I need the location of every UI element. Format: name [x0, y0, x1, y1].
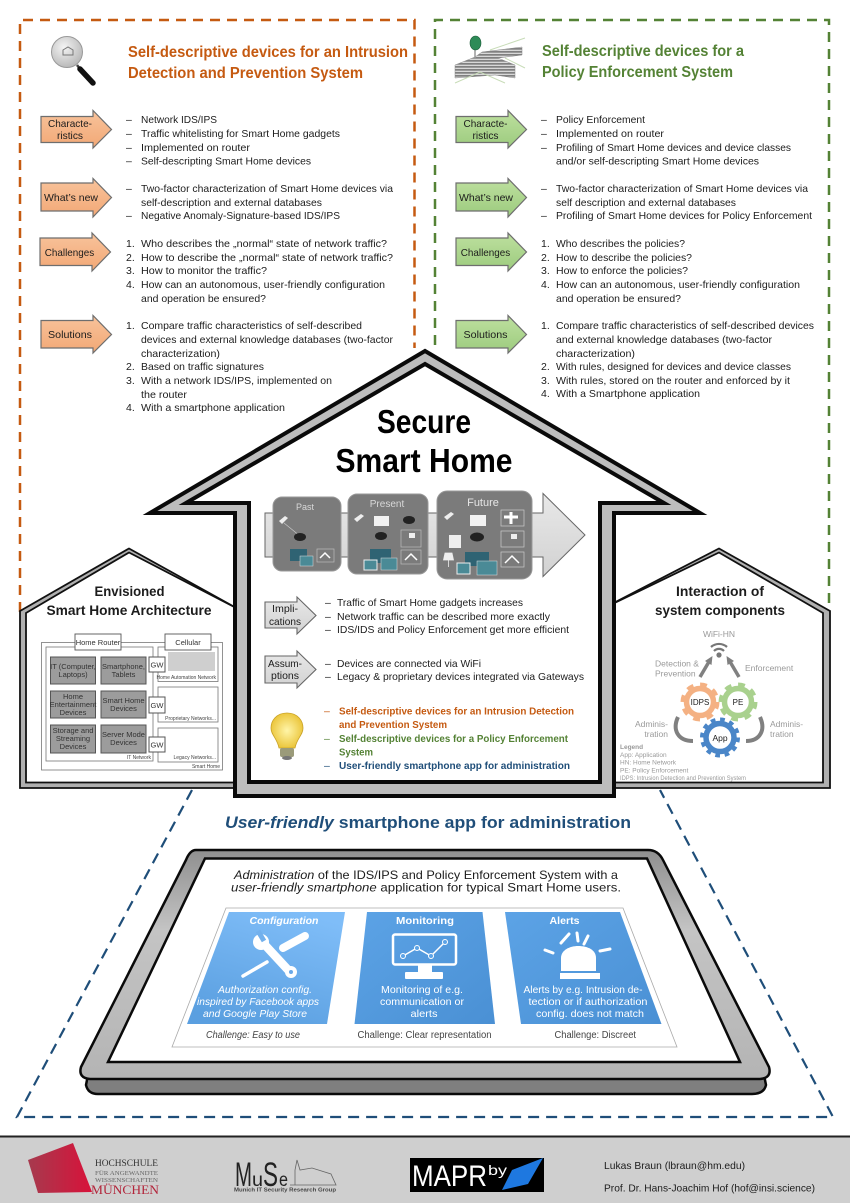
text: challenges list: and operation be ensured? — [141, 293, 266, 305]
heading: policy enforcement — [542, 43, 744, 81]
legend — [620, 744, 746, 782]
text: solutions list: 3. — [541, 375, 550, 387]
text: challenges — [206, 1030, 636, 1041]
arrow: characteristics: ristics — [472, 130, 498, 142]
text: characteristics list: Traffic whitelisting for Smart Home gadgets — [141, 128, 340, 140]
diagram: smart home architecture: Smartphone, — [102, 662, 145, 671]
house interior — [26, 552, 240, 782]
arrow: solutions: Solutions — [464, 329, 508, 341]
text: solutions list: Compare traffic characteristics of self-described — [141, 320, 362, 332]
text: challenges list: 1. — [541, 238, 550, 250]
diagram: smart home architecture: Proprietary Networks... — [165, 716, 216, 722]
arrow: what's new — [456, 178, 526, 217]
card: configuration: and Google Play Store — [203, 1008, 307, 1020]
gear: PE — [720, 684, 756, 720]
text: solutions list: 2. — [541, 361, 550, 373]
card: monitoring: communication or — [380, 996, 465, 1008]
text: challenges list: How can an autonomous, user-friendly configuration — [141, 279, 385, 291]
diagram: smart home architecture: IT (Computer, — [50, 662, 96, 671]
text: solutions list: With a smartphone application — [141, 402, 285, 414]
text: characteristics list: Policy Enforcement — [556, 114, 645, 126]
text: challenges list: How to describe the policies? — [556, 252, 692, 264]
text: challenges: Challenge: Clear representation — [358, 1030, 492, 1041]
text: assumptions: – — [325, 658, 331, 670]
icon: wrench and screwdriver — [243, 931, 305, 978]
text: challenges list: 1. — [126, 238, 135, 250]
card: configuration: Configuration — [250, 915, 318, 927]
dashed frame: smartphone app panel — [17, 790, 833, 1117]
arrow: solutions — [41, 316, 112, 353]
text: characteristics list: and/or self-descripting Smart Home devices — [556, 156, 759, 168]
timeline: past present future — [265, 491, 585, 579]
heading: interaction: Interaction of — [676, 583, 764, 599]
text: implications — [325, 597, 569, 636]
text: key contributions: Self-descriptive devices for a Policy Enforcement — [339, 733, 568, 745]
text: what's new list: self-description and external databases — [141, 197, 322, 209]
text: implications: IDS/IDS and Policy Enforcement get more efficient — [337, 624, 569, 636]
text: solutions list: Compare traffic characteristics of self-described devices — [556, 320, 814, 332]
card: configuration — [187, 912, 345, 1024]
diagram: smart home architecture: Smart Home — [102, 696, 145, 705]
footer — [0, 1136, 850, 1203]
text: solutions list: the router — [141, 389, 188, 401]
text: key contributions: Self-descriptive devices for an Intrusion Detection — [339, 706, 574, 718]
diagram: smart home architecture: Legacy Networks... — [173, 755, 216, 761]
text: solutions list: 2. — [126, 361, 135, 373]
text: solutions list: characterization) — [556, 348, 635, 360]
stage: future: Future — [467, 497, 499, 509]
diagram: smart home architecture: Entertainment — [50, 700, 97, 709]
icon: road with sign — [455, 36, 525, 83]
arrow: timeline — [265, 494, 585, 576]
text: authors — [604, 1160, 815, 1194]
text: solutions list: With rules, stored on the router and enforced by it — [556, 375, 790, 387]
text: what's new list — [126, 183, 393, 222]
diagram: smart home architecture: Cellular — [175, 638, 201, 647]
tablet base — [86, 1075, 766, 1094]
house interior — [600, 552, 823, 782]
text: assumptions — [325, 658, 584, 683]
text: solutions list: With rules, designed for devices and device classes — [556, 361, 791, 373]
dashed frame: intrusion detection panel — [20, 20, 414, 612]
diagram: smart home architecture: Laptops) — [58, 670, 88, 679]
arrow: assumptions: Assum- — [268, 658, 302, 670]
text: authors: Lukas Braun (lbraun@hm.edu) — [604, 1160, 745, 1172]
text: key contributions: – — [324, 733, 330, 745]
arrow: characteristics: Characte- — [464, 118, 508, 130]
legend: PE: Policy Enforcement — [620, 768, 688, 774]
diagram: gears: Enforcement — [745, 663, 794, 673]
diagram: smart home architecture: Tablets — [112, 670, 136, 679]
arrow: assumptions: ptions — [271, 670, 299, 682]
arrow: what's new — [41, 178, 112, 217]
text: characteristics list — [541, 114, 791, 168]
logo: Hochschule Muenchen — [28, 1143, 160, 1197]
text: solutions list: Based on traffic signatures — [141, 361, 264, 373]
heading: intrusion detection: Detection and Prevention System — [128, 65, 363, 82]
text: implications: Traffic of Smart Home gadgets increases — [337, 597, 523, 609]
arrow: solutions: Solutions — [48, 329, 92, 341]
text: characteristics list: – — [541, 142, 547, 154]
text: challenges list: How to describe the „normal“ state of network traffic? — [141, 252, 393, 264]
text: key contributions: System — [339, 746, 373, 758]
arrow: implications: cations — [269, 616, 301, 628]
arrow: what's new: What’s new — [459, 192, 513, 204]
text: solutions list: With a network IDS/IPS, implemented on — [141, 375, 332, 387]
diagram: smart home architecture: Storage and — [53, 726, 93, 735]
diagram: smart home architecture: Smart Home — [192, 764, 220, 770]
text: challenges list: and operation be ensured? — [556, 293, 681, 305]
diagram: smart home architecture: Streaming — [56, 734, 90, 743]
text: characteristics list: – — [541, 128, 547, 140]
gear: App — [702, 720, 738, 756]
title: Secure — [377, 403, 471, 440]
stage: future — [437, 491, 532, 579]
arrow: challenges — [40, 233, 110, 271]
text: solutions list: 4. — [126, 402, 135, 414]
text: assumptions: Devices are connected via WiFi — [337, 658, 481, 670]
card: monitoring: Monitoring of e.g. — [381, 984, 463, 996]
text: challenges list: How to monitor the traffic? — [141, 265, 267, 277]
arrow: characteristics: ristics — [57, 130, 83, 142]
text: what's new list: – — [541, 183, 547, 195]
text: challenges list: 4. — [126, 279, 135, 291]
text: what's new list: – — [541, 210, 547, 222]
heading: architecture: Envisioned — [94, 583, 164, 599]
tablet body — [80, 850, 770, 1079]
text: assumptions: – — [325, 671, 331, 683]
logo: Hochschule Muenchen: FÜR ANGEWANDTE — [95, 1170, 158, 1177]
diagram: smart home architecture: Devices — [60, 708, 87, 717]
text: tablet intro: Administration of the IDS/IPS and Policy Enforcement System with a — [233, 868, 618, 882]
text: characteristics list: Self-descripting Smart Home devices — [141, 156, 311, 168]
text: what's new list: Two-factor characterization of Smart Home devices via — [556, 183, 808, 195]
legend: Legend — [620, 744, 643, 751]
side house: envisioned architecture — [20, 548, 240, 788]
logo: MuSe: Munich IT Security Research Group — [234, 1188, 337, 1194]
heading: policy enforcement: Policy Enforcement System — [542, 64, 733, 81]
heading: interaction — [655, 583, 785, 618]
text: what's new list — [541, 183, 812, 222]
frame: cards outline — [172, 908, 677, 1047]
arrow: implications — [265, 597, 316, 634]
arrow: what's new: What’s new — [44, 192, 98, 204]
diagram: smart home architecture: Devices — [110, 704, 137, 713]
card: monitoring: Monitoring — [396, 915, 454, 927]
tablet screen — [108, 858, 740, 1062]
text: challenges list: 2. — [541, 252, 550, 264]
diagram: gears: Prevention — [655, 668, 696, 678]
text: challenges list: How can an autonomous, user-friendly configuration — [556, 279, 800, 291]
diagram: smart home architecture: GW — [151, 701, 164, 710]
diagram: gears: WiFi-HN — [703, 629, 735, 639]
title: Smart Home — [336, 442, 512, 479]
text: characteristics list — [126, 114, 340, 168]
diagram: gears: tration — [770, 729, 794, 739]
text: characteristics list: Implemented on router — [141, 142, 251, 154]
panel: intrusion detection and prevention — [40, 36, 408, 414]
gear: IDPS — [682, 684, 718, 720]
side house: interaction of system components — [600, 548, 830, 788]
text: implications: – — [325, 611, 331, 623]
card: alerts: Alerts by e.g. Intrusion de- — [524, 984, 643, 996]
footer top line — [0, 1136, 850, 1138]
text: challenges list: 2. — [126, 252, 135, 264]
arrow: characteristics — [41, 110, 112, 148]
text: what's new list: self description and external databases — [556, 197, 736, 209]
legend: IDPS: Intrusion Detection and Prevention System — [620, 775, 746, 782]
text: challenges list — [126, 238, 393, 305]
diagram: gears — [635, 629, 803, 756]
text: implications: – — [325, 624, 331, 636]
text: implications: Network traffic can be described more exactly — [337, 611, 551, 623]
text: characteristics list: Implemented on router — [556, 128, 664, 140]
logo: MAPR by — [410, 1158, 544, 1193]
text: what's new list: – — [126, 210, 132, 222]
icon: monitor chart — [393, 934, 456, 979]
stage: present: Present — [370, 499, 404, 510]
text: solutions list: 1. — [126, 320, 135, 332]
diagram: gears: Adminis- — [770, 719, 803, 729]
text: characteristics list: – — [126, 128, 132, 140]
text: what's new list: – — [126, 183, 132, 195]
icon: alarm beacon — [545, 933, 610, 979]
legend: HN: Home Network — [620, 760, 677, 766]
logo: MuSe: M — [235, 1156, 252, 1194]
text: challenges list: 3. — [126, 265, 135, 277]
icon: wifi — [711, 644, 727, 656]
heading: smartphone app: User-friendly smartphone app for administration — [225, 814, 631, 832]
text: key contributions: – — [324, 760, 330, 772]
text: tablet intro — [231, 868, 621, 894]
logo: Hochschule Muenchen: HOCHSCHULE — [95, 1158, 159, 1168]
house inner white area — [186, 364, 664, 782]
text: solutions list — [126, 320, 394, 414]
text: key contributions: User-friendly smartphone app for administration — [339, 760, 570, 772]
heading: interaction: system components — [655, 602, 785, 618]
title — [336, 403, 512, 479]
text: solutions list: 4. — [541, 388, 550, 400]
text: characteristics list: – — [126, 114, 132, 126]
arrow: challenges: Challenges — [45, 247, 94, 259]
logo: MuSe: e — [279, 1170, 288, 1191]
gear: PE: PE — [733, 698, 743, 707]
text: challenges list: 3. — [541, 265, 550, 277]
panel: policy enforcement — [455, 36, 814, 400]
diagram: gears: tration — [644, 729, 668, 739]
gear: IDPS: IDPS — [691, 698, 709, 707]
diagram: smart home architecture: Devices — [60, 742, 87, 751]
arrow: characteristics: Characte- — [48, 118, 92, 130]
text: challenges list: Who describes the policies? — [556, 238, 685, 250]
card: configuration: Authorization config. — [217, 984, 312, 996]
house outline — [20, 548, 240, 788]
arrow: challenges — [456, 233, 526, 271]
text: solutions list: devices and external knowledge databases (two-factor — [141, 334, 394, 346]
logo: MAPR by: MAPR — [412, 1160, 487, 1193]
text: what's new list: Negative Anomaly-Signature-based IDS/IPS — [141, 210, 340, 222]
text: challenges list: Who describes the „normal“ state of network traffic? — [141, 238, 387, 250]
text: key contributions: – — [324, 706, 330, 718]
text: characteristics list: – — [126, 156, 132, 168]
arrow: challenges: Challenges — [461, 247, 510, 259]
arrow: solutions — [456, 316, 526, 353]
diagram: gears: Detection & — [655, 658, 699, 668]
icon: magnifying glass — [52, 36, 93, 83]
tablet: smartphone app — [80, 850, 770, 1094]
diagram: smart home architecture: Home — [63, 692, 83, 701]
heading: intrusion detection: Self-descriptive devices for an Intrusion — [128, 44, 408, 61]
text: challenges list: How to enforce the policies? — [556, 265, 688, 277]
text: challenges: Challenge: Discreet — [554, 1030, 636, 1041]
heading: architecture — [46, 583, 212, 618]
card: alerts: Alerts — [550, 915, 580, 927]
text: solutions list — [541, 320, 814, 400]
logo: Hochschule Muenchen: WISSENSCHAFTEN — [95, 1177, 158, 1184]
gear: App: App — [712, 733, 728, 743]
text: tablet intro: user-friendly smartphone application for typical Smart Home users. — [231, 880, 621, 894]
house outer outline — [150, 351, 700, 796]
stage: past — [273, 497, 341, 571]
arrow: implications: Impli- — [272, 603, 299, 615]
diagram: smart home architecture: GW — [151, 660, 164, 670]
dashed frame: policy enforcement panel — [435, 20, 829, 612]
heading: policy enforcement: Self-descriptive devices for a — [542, 43, 744, 60]
diagram: smart home architecture: IT Network — [127, 755, 151, 761]
card: alerts — [505, 912, 662, 1024]
card: monitoring — [354, 912, 495, 1024]
text: challenges list: 4. — [541, 279, 550, 291]
arrow: assumptions — [265, 651, 316, 688]
stage: past: Past — [296, 502, 315, 512]
text: challenges list — [541, 238, 800, 305]
text: characteristics list: – — [541, 114, 547, 126]
text: authors: Prof. Dr. Hans-Joachim Hof (hof@insi.science) — [604, 1182, 815, 1194]
legend: App: Application — [620, 752, 667, 759]
text: solutions list: 1. — [541, 320, 550, 332]
icon: light bulb — [271, 713, 303, 760]
diagram: smart home architecture: Home Router — [76, 638, 121, 647]
text: challenges: Challenge: Easy to use — [206, 1030, 300, 1041]
diagram: smart home architecture: Devices — [110, 738, 137, 747]
text: solutions list: characterization) — [141, 348, 220, 360]
diagram: smart home architecture: GW — [151, 740, 164, 750]
text: characteristics list: – — [126, 142, 132, 154]
stage: present — [348, 494, 428, 574]
diagram: smart home architecture: Home Automation Network — [157, 675, 216, 681]
diagram: smart home architecture — [42, 634, 222, 770]
logo: MAPR by: by — [488, 1162, 507, 1178]
card: alerts: tection or if authorization — [528, 996, 648, 1008]
text: solutions list: 3. — [126, 375, 135, 387]
logo: Hochschule Muenchen: MÜNCHEN — [91, 1182, 160, 1197]
logo: MuSe: S — [263, 1156, 278, 1194]
heading: intrusion detection — [128, 44, 408, 82]
card: alerts: config. does not match — [536, 1008, 644, 1020]
text: key contributions — [324, 706, 574, 772]
text: assumptions: Legacy & proprietary devices integrated via Gateways — [337, 671, 584, 683]
text: solutions list: and external knowledge databases (two-factor — [556, 334, 773, 346]
main house: secure smart home — [150, 351, 700, 796]
text: implications: – — [325, 597, 331, 609]
house outline — [600, 548, 830, 788]
diagram: gears: Adminis- — [635, 719, 668, 729]
footer background — [0, 1137, 850, 1203]
text: characteristics list: Profiling of Smart Home devices and device classes — [556, 142, 791, 154]
text: what's new list: Two-factor characterization of Smart Home devices via — [141, 183, 393, 195]
text: characteristics list: Network IDS/IPS — [141, 114, 217, 126]
arrow: characteristics — [456, 110, 526, 148]
heading: architecture: Smart Home Architecture — [46, 602, 212, 618]
text: solutions list: With a Smartphone application — [556, 388, 700, 400]
text: what's new list: Profiling of Smart Home devices for Policy Enforcement — [556, 210, 812, 222]
logo: MuSe — [234, 1156, 337, 1194]
diagram: smart home architecture: Server Mode — [102, 730, 145, 739]
logo: MuSe: u — [252, 1170, 263, 1191]
text: key contributions: and Prevention System — [339, 719, 447, 731]
card: configuration: inspired by Facebook apps — [197, 996, 320, 1008]
card: monitoring: alerts — [410, 1008, 438, 1020]
